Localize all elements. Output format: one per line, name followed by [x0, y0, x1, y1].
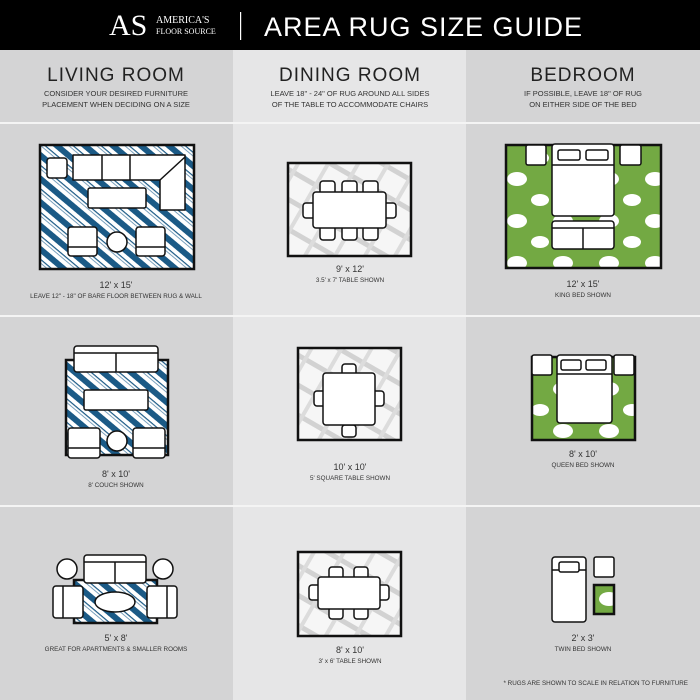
column headings: LEAVE 18" - 24" OF RUG AROUND ALL SIDES — [270, 89, 430, 98]
column headings: DINING ROOM — [279, 65, 421, 86]
captions: 3' x 6' TABLE SHOWN — [318, 658, 382, 665]
column headings: BEDROOM — [530, 65, 636, 86]
living 8x10 — [66, 346, 168, 458]
column headings: PLACEMENT WHEN DECIDING ON A SIZE — [42, 100, 190, 109]
bedroom 8x10 — [532, 355, 635, 440]
dining 10x10 — [298, 348, 401, 440]
footnote: * RUGS ARE SHOWN TO SCALE IN RELATION TO FURNITURE — [503, 680, 688, 687]
logo: AS — [109, 9, 147, 42]
captions: 10' x 10' — [334, 462, 367, 472]
captions: 12' x 15' — [100, 280, 133, 290]
column headings: CONSIDER YOUR DESIRED FURNITURE — [44, 89, 188, 98]
captions: 3.5' x 7' TABLE SHOWN — [316, 277, 385, 284]
column headings: IF POSSIBLE, LEAVE 18" OF RUG — [524, 89, 642, 98]
captions: 5' x 8' — [105, 633, 128, 643]
bedroom 12x15 — [506, 144, 661, 268]
captions: 8' COUCH SHOWN — [88, 482, 144, 489]
captions: TWIN BED SHOWN — [555, 646, 612, 653]
captions: GREAT FOR APARTMENTS & SMALLER ROOMS — [45, 646, 187, 653]
column headings: LIVING ROOM — [47, 65, 185, 86]
captions: 12' x 15' — [567, 279, 600, 289]
living 5x8 — [53, 555, 177, 623]
dining 8x10 — [298, 552, 401, 636]
captions: 8' x 10' — [102, 469, 130, 479]
column headings — [42, 65, 642, 109]
captions: 9' x 12' — [336, 264, 364, 274]
captions: KING BED SHOWN — [555, 292, 611, 299]
dining 9x12 — [288, 163, 411, 256]
column headings: OF THE TABLE TO ACCOMMODATE CHAIRS — [272, 100, 428, 109]
header bar — [0, 0, 700, 50]
column headings: ON EITHER SIDE OF THE BED — [529, 100, 637, 109]
living 12x15 — [40, 145, 194, 269]
captions: 2' x 3' — [572, 633, 595, 643]
logo: FLOOR SOURCE — [156, 27, 216, 36]
captions: 8' x 10' — [336, 645, 364, 655]
captions — [30, 264, 615, 665]
logo: AMERICA'S — [156, 15, 209, 26]
captions: LEAVE 12" - 18" OF BARE FLOOR BETWEEN RUG & WALL — [30, 293, 202, 300]
captions: QUEEN BED SHOWN — [552, 462, 615, 469]
logo — [109, 9, 216, 42]
captions: 8' x 10' — [569, 449, 597, 459]
bedroom 2x3 — [552, 557, 614, 622]
captions: 5' SQUARE TABLE SHOWN — [310, 475, 390, 482]
title: AREA RUG SIZE GUIDE — [264, 12, 583, 42]
